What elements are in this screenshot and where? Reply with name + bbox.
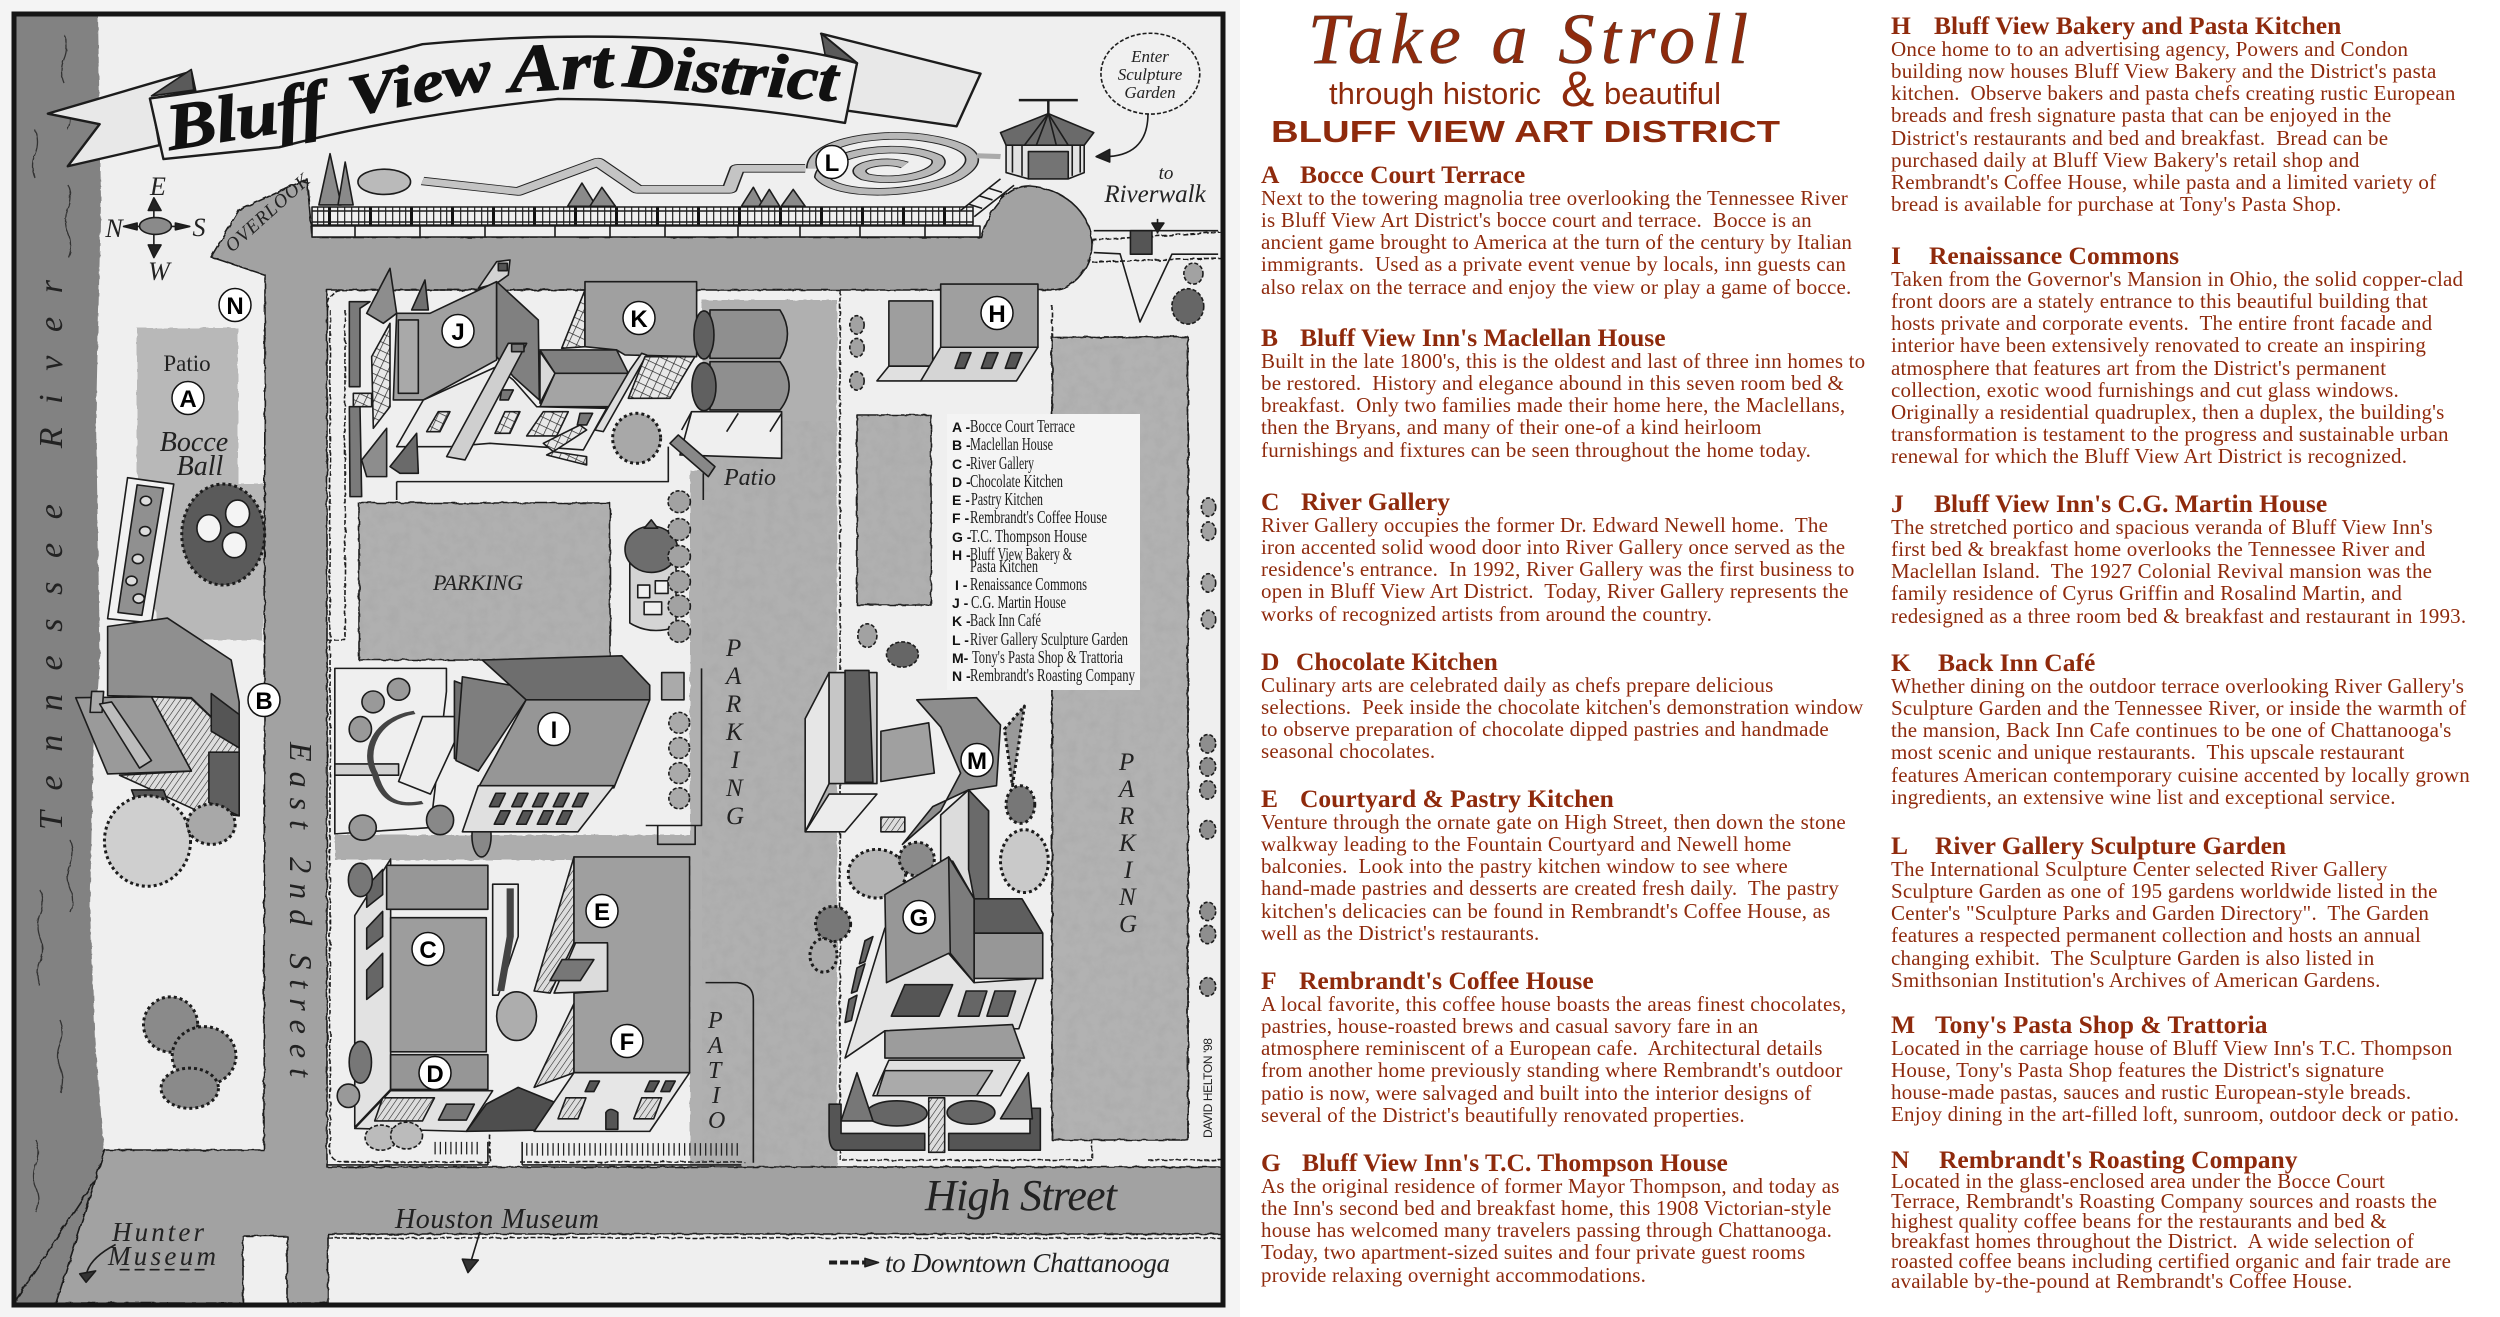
text block: L River Gallery Sculpture Garden: L: [1891, 831, 1908, 860]
grain texture on center parking: [359, 503, 610, 660]
legend entries: D -: [952, 474, 971, 490]
marker F: [611, 1024, 643, 1058]
legend entries: K -: [952, 613, 971, 629]
legend entries: Pastry Kitchen: [971, 489, 1043, 509]
text block: E Courtyard & Pastry Kitchen: Venture through the ornate gate on High Street, then down the stone walkway leading to the Fountain Courtyard and Newell home balconies. Look into the pastry kitchen window to see where hand-made pastries and desserts are created fresh daily. The pastry kitchen's delicacies can be found in Rembrandt's Coffee House, as well as the District's restaurants.: [1261, 810, 1846, 945]
text block: N Rembrandt's Roasting Company: Located in the glass-enclosed area under the Bocce Court Terrace, Rembrandt's Roasting Company sources and roasts the highest quality coffee beans for the restaurants and bed & breakfast homes throughout the District. A wide selection of roasted coffee beans including certified organic and fair trade are available by-the-pound at Rembrandt's Coffee House.: [1891, 1169, 2451, 1293]
large riverside trees: [104, 796, 236, 1108]
marker B: [248, 684, 280, 716]
legend entries: I -: [955, 577, 968, 593]
label: Enter Sculpture Garden: Garden: [1124, 83, 1176, 102]
marker D: [419, 1056, 451, 1090]
text block: M Tony's Pasta Shop & Trattoria: Located in the carriage house of Bluff View Inn's T.C. Thompson House, Tony's Pasta Shop features the District's signature house-made pastas, sauces and rustic European-style breads. Enjoy dining in the art-filled loft, sunroom, outdoor deck or patio.: [1891, 1036, 2459, 1126]
text block: A Bocce Court Terrace: A: [1261, 160, 1279, 189]
marker G: [903, 900, 935, 934]
building G: T.C. Thompson House: [829, 790, 1043, 1152]
block sidewalks: [16, 232, 1222, 1300]
map drawing traced from the upper half: [48, 33, 1218, 667]
marker M: [961, 744, 993, 776]
text block: C River Gallery: River Gallery: [1301, 487, 1450, 516]
legend entries: Rembrandt's Coffee House: [970, 507, 1107, 527]
text block: B Bluff View Inn's Maclellan House: B: [1261, 323, 1278, 352]
marker I: [538, 712, 570, 746]
building M: Tony's Pasta Shop: [805, 670, 1000, 844]
legend entries: Bocce Court Terrace: [970, 416, 1075, 436]
marker A: [172, 382, 204, 414]
block inner walkway lines: [397, 447, 703, 500]
label: Patio beside K: Patio: [723, 465, 776, 491]
label: artist signature: DAVID HELTON '98: [1201, 1038, 1215, 1138]
sculpture garden spiral path: [358, 136, 1000, 194]
marker E: E: [594, 899, 610, 926]
gazebo and stair rail: [961, 100, 1094, 217]
buildings J and K with patio, traced at 3x: [349, 260, 789, 500]
text block: E Courtyard & Pastry Kitchen: E: [1261, 784, 1278, 813]
map drawing traced from the lower half: [76, 618, 1216, 1282]
label: Patio and Bocce Ball: Bocce: [160, 427, 228, 458]
grain texture on right parking: [1052, 337, 1188, 1140]
legend entries: G -: [952, 529, 972, 545]
legend entries: T.C. Thompson House: [970, 526, 1087, 546]
map legend: [947, 414, 1140, 690]
riverwalk steps and culvert: [1094, 219, 1218, 322]
text block: M Tony's Pasta Shop & Trattoria: Tony's Pasta Shop & Trattoria: [1935, 1010, 2268, 1039]
subtitle line: through historic: [1329, 76, 1541, 111]
tree in front of J: [613, 413, 661, 463]
legend entries: Renaissance Commons: [970, 574, 1087, 594]
marker H: H: [988, 301, 1006, 328]
label: East 2nd Street: East 2nd Street: [283, 741, 319, 1078]
subtitle end: beautiful: [1604, 76, 1721, 111]
label: Tennessee River: Tennessee River: [33, 279, 70, 830]
banner word: Bluff: Bluff: [160, 67, 337, 165]
marker K: [623, 302, 655, 334]
legend entries: Back Inn Café: [970, 610, 1041, 630]
text block: C River Gallery: C: [1261, 487, 1279, 516]
marker H: [981, 296, 1013, 330]
label: High Street: High Street: [924, 1171, 1119, 1220]
legend entries: Tony's Pasta Shop & Trattoria: [972, 647, 1123, 667]
legend entries: A -: [952, 419, 970, 435]
building K: Back Inn Cafe: [562, 282, 789, 411]
text block: K Back Inn Cafe: Back Inn Café: [1938, 648, 2095, 677]
label: Enter Sculpture Garden: Enter: [1130, 47, 1169, 66]
text block: M Tony's Pasta Shop & Trattoria: M: [1891, 1010, 1915, 1039]
marker C: [412, 932, 444, 966]
label: Patio and Bocce Ball: [160, 351, 228, 482]
text block: F Rembrandt's Coffee House: Rembrandt's Coffee House: [1299, 966, 1594, 995]
building E and F: Pastry Kitchen and Rembrandt's: [534, 857, 690, 1131]
label: to Riverwalk: to: [1159, 163, 1173, 184]
panel: illustrated map of Bluff View Art District: [0, 0, 1240, 1317]
text block: J Bluff View Inn's C.G. Martin House: The stretched portico and spacious veranda of Bluff View Inn's first bed & breakfast home overlooks the Tennessee River and Maclellan Island. The 1927 Colonial Revival mansion was the family residence of Cyrus Griffin and Rosalind Martin, and redesigned as a three room bed & breakfast and restaurant in 1993.: [1891, 515, 2466, 628]
marker M: M: [967, 748, 987, 775]
roads: overlook, East 2nd Street and High Street: [56, 179, 1222, 1303]
marker J: [442, 314, 474, 348]
bocce court: [108, 478, 174, 623]
marker D: D: [426, 1061, 444, 1088]
marker K: K: [630, 306, 648, 333]
building C and D: River Gallery and Chocolate Kitchen: [337, 859, 554, 1150]
legend entries: C -: [952, 456, 971, 472]
text block: H Bluff View Bakery and Pasta Kitchen: Bluff View Bakery and Pasta Kitchen: [1934, 11, 2341, 40]
courtyard garden beside building I: [335, 668, 491, 857]
river: [15, 15, 104, 1303]
marker N: N: [226, 293, 244, 320]
right side shrubs: [1200, 735, 1216, 996]
rear patio: [670, 412, 782, 477]
legend entries: River Gallery Sculpture Garden: [970, 629, 1128, 649]
marker L: [816, 146, 848, 178]
compass rose: [124, 198, 190, 258]
label: Parking lot: PARKING: [432, 570, 523, 595]
legend entries: F -: [952, 510, 969, 526]
flowering magnolia tree: [182, 484, 265, 585]
compass letters: [104, 172, 206, 286]
legend entries: L -: [952, 632, 969, 648]
text block: J Bluff View Inn's C.G. Martin House: J: [1891, 489, 1904, 518]
text block: J Bluff View Inn's C.G. Martin House: Bluff View Inn's C.G. Martin House: [1934, 489, 2327, 518]
label: Hunter Museum: [107, 1217, 216, 1271]
map paper background: [0, 0, 1240, 1317]
label: Overlook: OVERLOOK: [221, 169, 315, 257]
side hedge: [349, 302, 372, 497]
river waves: [32, 35, 72, 1212]
text block: A Bocce Court Terrace: Bocce Court Terrace: [1300, 160, 1525, 189]
marker F: F: [620, 1029, 634, 1056]
text block: E Courtyard & Pastry Kitchen: Courtyard & Pastry Kitchen: [1300, 784, 1614, 813]
building B: Maclellan House: [76, 618, 239, 816]
fountain courtyard walkway: [493, 884, 537, 1040]
text block: G Bluff View Inn's T.C. Thompson House: Bluff View Inn's T.C. Thompson House: [1302, 1148, 1728, 1177]
sculpture garden sign: [1096, 33, 1200, 162]
label: to Riverwalk: [1103, 163, 1207, 208]
compass letters: E: [149, 172, 166, 201]
large ampersand: &: [1561, 61, 1594, 117]
evergreen trees at J: [367, 268, 428, 323]
marker I: I: [551, 717, 557, 744]
title: Take a Stroll through historic & beautiful Bluff View Art District: [1271, 0, 1780, 149]
building J: C.G. Martin House: [362, 260, 695, 477]
text block: A Bocce Court Terrace: Next to the towering magnolia tree overlooking the Tennessee River is Bluff View Art District's bocce court and terrace. Bocce is an ancient game brought to America at the turn of the century by Italian immigrants. Used as a private event venue by locals, inn guests can also relax on the terrace and enjoy the view or play a game of bocce.: [1261, 186, 1852, 299]
marker E: [586, 894, 618, 928]
label: Parking column one: PARKING: [724, 635, 744, 830]
compass letters: S: [192, 213, 206, 242]
legend entries: H -: [952, 547, 971, 563]
label: Patio and Bocce Ball: Ball: [177, 451, 224, 482]
banner word: District: District: [620, 32, 842, 115]
legend entries: J -: [952, 595, 969, 611]
legend entries: N -: [952, 668, 971, 684]
text block: B Bluff View Inn's Maclellan House: Built in the late 1800's, this is the oldest and last of three inn homes to be restored. History and elegance abound in this seven room bed & breakfast. Only two families made their home here, the Maclellans, then the Bryans, and many of their one-of a kind heirloom furnishings and fixtures can be seen throughout the home today.: [1261, 349, 1865, 462]
text block: D Chocolate Kitchen: D: [1261, 647, 1279, 676]
text block: N Rembrandt's Roasting Company: Rembrandt's Roasting Company: [1939, 1145, 2297, 1174]
district name: BLUFF VIEW ART DISTRICT: [1271, 114, 1780, 149]
banner title: [160, 26, 842, 165]
text block: I Renaissance Commons: Renaissance Commons: [1929, 241, 2179, 270]
label: Houston Museum: Houston Museum: [394, 1204, 599, 1235]
label: Patio vertical: PATIO: [706, 1008, 725, 1134]
legend entries: M-: [952, 650, 969, 666]
legend entries: B -: [952, 437, 971, 453]
legend entries: Pasta Kitchen: [970, 556, 1038, 576]
text block: L River Gallery Sculpture Garden: River Gallery Sculpture Garden: [1935, 831, 2286, 860]
text block: N Rembrandt's Roasting Company: N: [1891, 1145, 1909, 1174]
text block: D Chocolate Kitchen: Chocolate Kitchen: [1296, 647, 1498, 676]
front fence and patio border on High Street: [327, 983, 753, 1165]
marker G: G: [910, 905, 928, 932]
text block: D Chocolate Kitchen: Culinary arts are celebrated daily as chefs prepare delicious selections. Peek inside the chocolate kitchen's demonstration window to observe preparation of chocolate dipped pastries and handmade seasonal chocolates.: [1261, 673, 1864, 763]
label: Parking column two: PARKING: [1117, 749, 1137, 938]
text block: I Renaissance Commons: Taken from the Governor's Mansion in Ohio, the solid copper-clad front doors are a stately entrance to this beautiful building that hosts private and corporate events. The entire front facade and interior have been extensively renovated to create an inspiring atmosphere that features art from the District's permanent collection, exotic wood furnishings and cut glass windows. Originally a residential quadruplex, then a duplex, the building's transformation is testament to the progress and sustainable urban renewal for which the Bluff View Art District is recognized.: [1891, 267, 2463, 468]
label: to Downtown Chattanooga: to Downtown Chattanooga: [885, 1248, 1170, 1278]
trees around building G: [810, 706, 1048, 972]
label: Patio and Bocce Ball: Patio: [163, 351, 211, 376]
marker J: J: [451, 319, 465, 346]
text block: L River Gallery Sculpture Garden: The International Sculpture Center selected River Gallery Sculpture Garden as one of 195 gardens worldwide listed in the Center's "Sculpture Parks and Garden Directory". The Garden features a respected permanent collection and hosts an annual changing exhibit. The Sculpture Garden is also listed in Smithsonian Institution's Archives of American Gardens.: [1891, 857, 2438, 992]
text block: H Bluff View Bakery and Pasta Kitchen: Once home to to an advertising agency, Powers and Condon building now houses Bluff View Bakery and the District's pasta kitchen. Observe bakers and pasta chefs creating rustic European breads and fresh signature pasta that can be enjoyed in the District's restaurants and bed and breakfast. Bread can be purchased daily at Bluff View Bakery's retail shop and Rembrandt's Coffee House, while pasta and a limited variety of bread is available for purchase at Tony's Pasta Shop.: [1891, 37, 2456, 216]
text block: I Renaissance Commons: I: [1891, 241, 1901, 270]
legend entries: River Gallery: [970, 453, 1034, 473]
text block: G Bluff View Inn's T.C. Thompson House: As the original residence of former Mayor Thompson, and today as the Inn's second bed and breakfast home, this 1908 Victorian-style house has welcomed many travelers passing through Chattanooga. Today, two apartment-sized suites and four private guest rooms provide relaxing overnight accommodations.: [1261, 1174, 1840, 1287]
label: Hunter Museum: Hunter: [111, 1217, 204, 1247]
title script line: Take a Stroll: [1308, 0, 1748, 79]
water tower: [625, 520, 678, 631]
picket fence along the top road: [312, 207, 980, 237]
label: Enter Sculpture Garden: [1118, 47, 1183, 102]
label: to Riverwalk: Riverwalk: [1103, 181, 1207, 208]
grain texture on narrow parking: [857, 415, 931, 605]
legend entries: Rembrandt's Roasting Company: [970, 665, 1135, 685]
marker B: B: [255, 688, 273, 715]
marker C: C: [419, 937, 437, 964]
street arrows: [80, 1232, 879, 1282]
text block: G Bluff View Inn's T.C. Thompson House: G: [1261, 1148, 1281, 1177]
legend entries: Maclellan House: [970, 434, 1053, 454]
building I: Renaissance Commons: [454, 656, 702, 844]
text block: F Rembrandt's Coffee House: F: [1261, 966, 1277, 995]
text block: C River Gallery: River Gallery occupies the former Dr. Edward Newell home. The iron accented solid wood door into River Gallery once served as the residence's entrance. In 1992, River Gallery was the first business to open in Bluff View Art District. Today, River Gallery represents the works of recognized artists from around the country.: [1261, 513, 1855, 626]
marker N: [219, 288, 251, 322]
legend entries: Chocolate Kitchen: [970, 471, 1063, 491]
legend entries: [952, 416, 1135, 685]
grain texture on gravel: [702, 421, 837, 1167]
building H: Bluff View Bakery: [877, 284, 1038, 381]
legend entries: E -: [952, 492, 970, 508]
map interior paper: [15, 15, 1223, 1305]
compass letters: W: [148, 257, 172, 286]
evergreen trees by the fence: [319, 154, 805, 206]
banner word: View: View: [342, 37, 497, 129]
text block: K Back Inn Cafe: Whether dining on the outdoor terrace overlooking River Gallery's Sculpture Garden and the Tennessee River, or inside the warmth of the mansion, Back Inn Cafe continues to be one of Chattanooga's most scenic and unique restaurants. This upscale restaurant features American contemporary cuisine accented by locally grown ingredients, an extensive wine list and exceptional service.: [1891, 674, 2470, 809]
legend entries: C.G. Martin House: [971, 592, 1066, 612]
location markers: [172, 146, 1013, 1090]
text block: B Bluff View Inn's Maclellan House: Bluff View Inn's Maclellan House: [1300, 323, 1666, 352]
shrubs along walkways: [668, 263, 1216, 667]
legend backdrop: [947, 414, 1140, 690]
text block: F Rembrandt's Coffee House: A local favorite, this coffee house boasts the areas finest chocolates, pastries, house-roasted brews and casual savory fare in an atmosphere reminiscent of a European cafe. Architectural details from another home previously standing where Rembrandt's outdoor patio is now, were salvaged and built into the interior designs of several of the District's beautifully renovated properties.: [1261, 992, 1846, 1127]
banner word: Art: Art: [502, 26, 617, 107]
map base shapes: [15, 15, 1223, 1305]
text block: H Bluff View Bakery and Pasta Kitchen: H: [1891, 11, 1911, 40]
gravel and parking grounds: [137, 300, 1188, 1170]
marker A: A: [179, 386, 197, 413]
text block: K Back Inn Cafe: K: [1891, 648, 1911, 677]
label: Enter Sculpture Garden: Sculpture: [1118, 65, 1183, 84]
marker L: L: [825, 150, 839, 177]
label: Hunter Museum: Museum: [107, 1241, 216, 1271]
compass letters: N: [104, 214, 124, 243]
legend entries: Bluff View Bakery &: [970, 544, 1072, 564]
map frame: [14, 14, 1223, 1305]
ribbon banner: [48, 34, 981, 166]
